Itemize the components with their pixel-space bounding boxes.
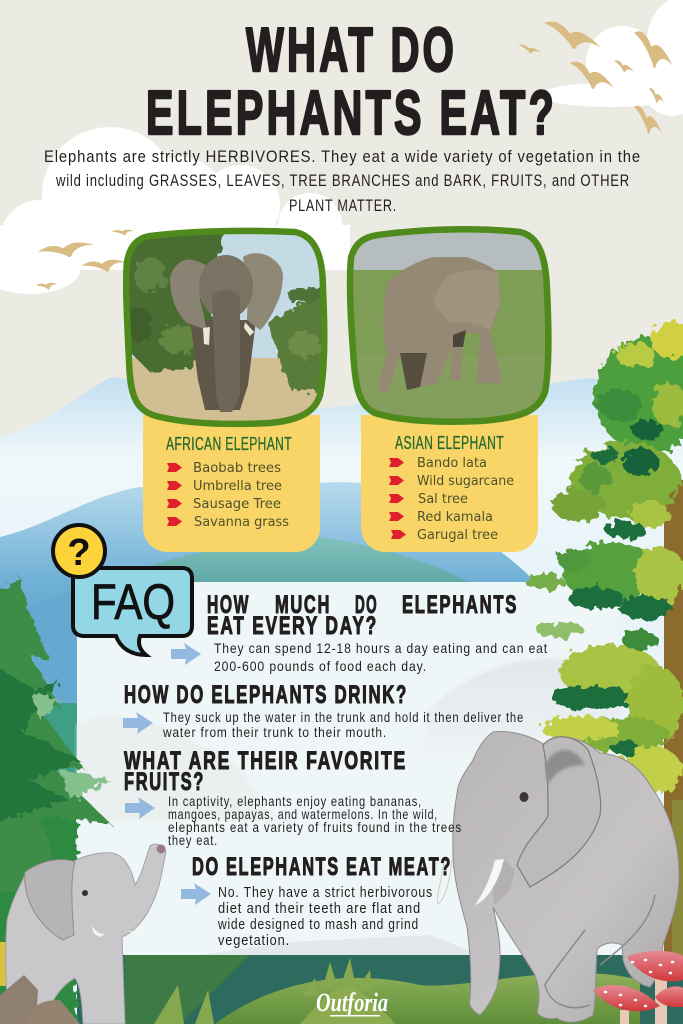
photo: Asian elephant <box>353 232 546 418</box>
card: African elephant list <box>143 415 320 552</box>
tusk <box>475 859 504 905</box>
illustration: mushrooms <box>593 951 683 1024</box>
photo frames <box>126 229 548 424</box>
list: African elephant foods <box>167 460 289 530</box>
FAQ question 3: WHAT ARE THEIR FAVORITE <box>124 747 407 775</box>
FAQ question 3 <box>124 747 462 848</box>
arrow <box>123 712 153 734</box>
FAQ question 4: DO ELEPHANTS EAT MEAT? <box>192 853 452 881</box>
answer: They suck up the water in the trunk and hold it then deliver the <box>163 709 524 725</box>
question mark circle: ? <box>67 532 91 574</box>
list: African elephant foods: Savanna grass <box>194 514 289 530</box>
background: watercolor mountains <box>0 377 683 1024</box>
ear <box>25 860 75 940</box>
answer: They can spend 12-18 hours a day eating and can eat <box>214 640 548 656</box>
FAQ badge <box>53 525 192 655</box>
FAQ question 1 <box>171 591 548 674</box>
illustration: yellow trunk detail <box>0 942 8 986</box>
FAQ question 3: elephants eat a variety of fruits found in the trees <box>168 819 462 835</box>
FAQ question 3: they eat. <box>168 832 218 848</box>
list: Asian elephant foods: Sal tree <box>418 491 468 507</box>
FAQ question 2 <box>123 681 524 740</box>
trunk tip <box>156 844 166 854</box>
FAQ question 1: EAT EVERY DAY? <box>207 612 378 640</box>
FAQ label: FAQ <box>91 574 175 630</box>
ear <box>517 737 601 887</box>
list: Asian elephant foods: Wild sugarcane <box>417 473 514 489</box>
FAQ question 4: wide designed to mash and grind <box>217 916 419 933</box>
background: clouds <box>0 0 683 294</box>
list: African elephant foods: Baobab trees <box>193 460 281 476</box>
speech bubble <box>73 568 192 655</box>
illustration: large elephant <box>438 732 679 1022</box>
illustration: baby elephant <box>6 844 166 1024</box>
arrow <box>181 883 211 905</box>
FAQ question 4: vegetation. <box>218 932 290 949</box>
list: Asian elephant foods: Garugal tree <box>417 527 498 543</box>
arrow <box>125 797 155 819</box>
FAQ question 4: diet and their teeth are flat and <box>218 900 421 917</box>
heading: Asian elephant: ASIAN ELEPHANT <box>395 433 504 453</box>
FAQ question 2: HOW DO ELEPHANTS DRINK? <box>124 681 408 709</box>
tusk <box>92 926 105 937</box>
FAQ question 2: water from their trunk to their mouth. <box>162 724 387 740</box>
FAQ question 1: 200-600 pounds of food each day. <box>214 658 427 674</box>
illustration: pine tree left <box>0 575 112 1024</box>
FAQ question 3: mangoes, papayas, and watermelons. In the wild, <box>168 806 438 822</box>
panel: FAQ backdrop <box>77 582 620 955</box>
answer: No. They have a strict herbivorous <box>218 884 433 901</box>
FAQ question 1: DO <box>355 591 378 619</box>
FAQ question 1: HOW <box>207 591 250 619</box>
background: ground band and hills <box>77 955 683 1024</box>
intro text <box>44 147 641 215</box>
eye <box>520 792 528 802</box>
answer: In captivity, elephants enjoy eating bananas, <box>168 793 422 809</box>
list: Asian elephant foods <box>389 455 514 543</box>
heading: African elephant: AFRICAN ELEPHANT <box>166 434 292 454</box>
logo: Outforia: Outforia <box>316 988 388 1017</box>
list: African elephant foods: Sausage Tree <box>193 496 281 512</box>
illustration: tree right <box>525 322 683 970</box>
eye <box>82 890 88 896</box>
FAQ question 1: MUCH <box>275 591 331 619</box>
FAQ question 3: FRUITS? <box>124 768 205 796</box>
list: Asian elephant foods: Bando lata <box>417 455 487 471</box>
illustration: rocks <box>0 975 80 1024</box>
title: WHAT DO <box>246 16 457 85</box>
arrow <box>171 643 201 665</box>
card: Asian elephant list <box>361 415 538 552</box>
title <box>146 16 557 148</box>
decorative birds <box>36 22 673 295</box>
intro text: PLANT MATTER. <box>289 196 397 215</box>
FAQ question 1: ELEPHANTS <box>402 591 518 619</box>
list: Asian elephant foods: Red kamala <box>417 509 493 525</box>
photo: African elephant <box>129 234 321 421</box>
list: African elephant foods: Umbrella tree <box>193 478 282 494</box>
FAQ question 4 <box>181 853 452 949</box>
